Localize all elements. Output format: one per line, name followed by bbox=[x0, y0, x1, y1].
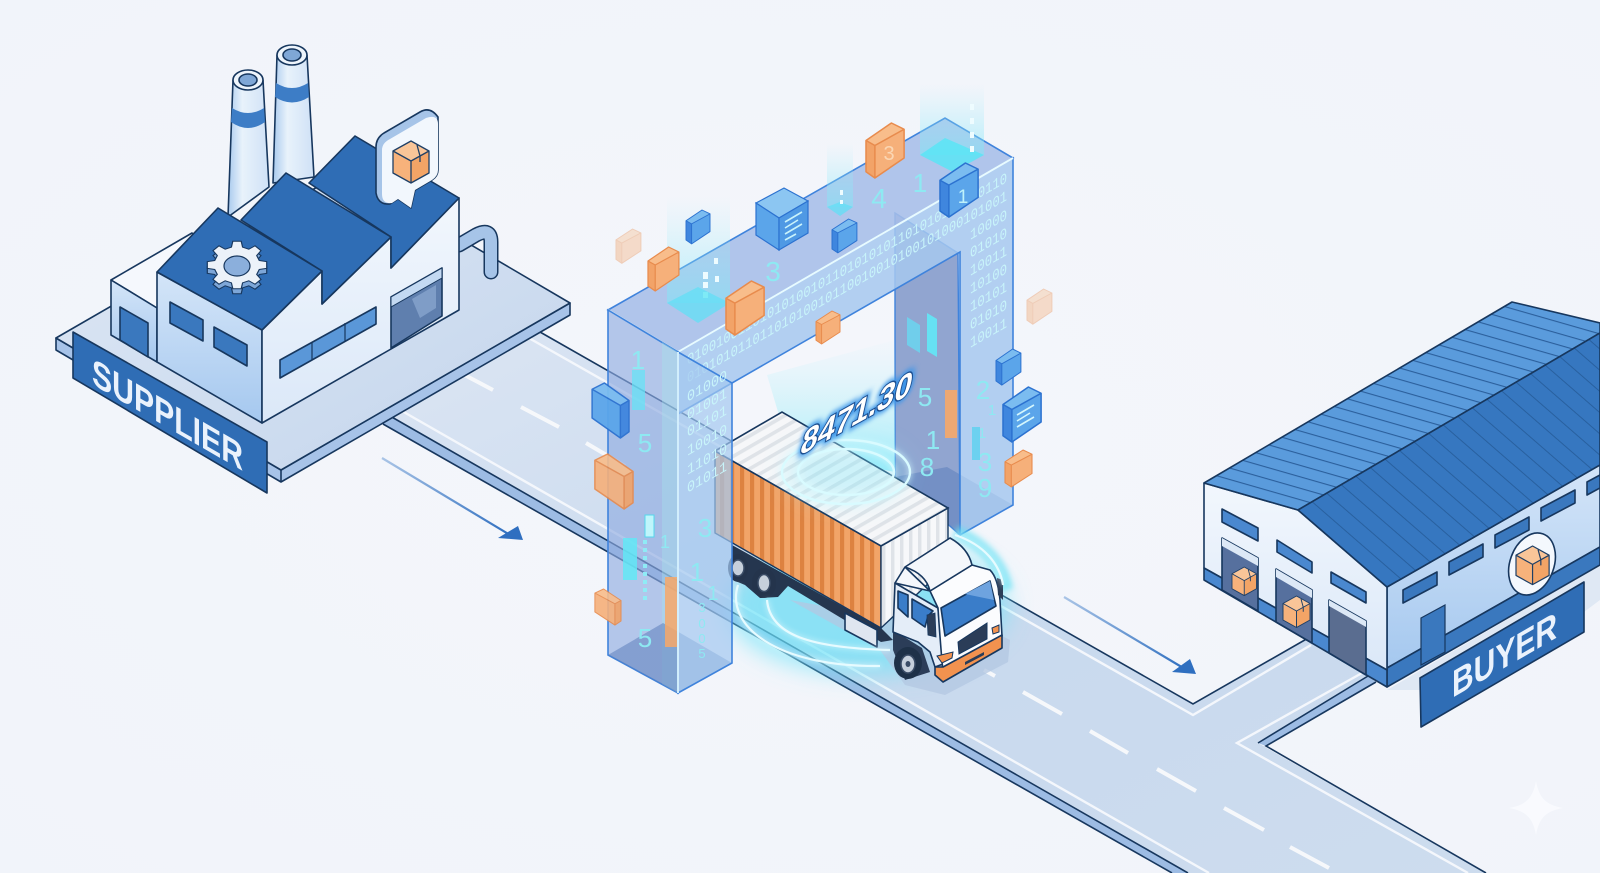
binary code on right pillar: 10000 bbox=[970, 207, 1007, 245]
blue cube left pillar bbox=[592, 383, 629, 438]
digits on left pillar: 5 bbox=[638, 623, 652, 653]
digits on gate right side: 1 bbox=[913, 168, 927, 198]
scan beam bbox=[767, 340, 895, 472]
digits on gate right side: 3 bbox=[978, 447, 992, 477]
gate bright edge bbox=[608, 158, 1013, 352]
digits on left pillar: 0 bbox=[698, 616, 706, 631]
speech bubble with box bbox=[376, 110, 438, 208]
blue document cube right bbox=[1003, 387, 1041, 442]
label: supplier: SUPPLIER bbox=[92, 350, 243, 479]
HS code readout: 8471.30 bbox=[797, 361, 917, 464]
orange cube large bbox=[726, 281, 764, 335]
ground glow under truck bbox=[727, 538, 1007, 674]
blue cube bbox=[832, 219, 857, 253]
binary code on right pillar: 10011 bbox=[970, 315, 1007, 353]
cab glow arc bbox=[955, 532, 1006, 590]
side annex bbox=[111, 233, 240, 362]
data bars on right pillar bbox=[907, 313, 980, 460]
roof front slope bbox=[1298, 333, 1600, 587]
arrow: supplier to gate bbox=[382, 458, 523, 540]
label: buyer bbox=[1420, 582, 1584, 727]
left pillar side highlight band bbox=[662, 342, 678, 693]
digits on left pillar bbox=[631, 345, 719, 661]
left pillar floor bbox=[608, 623, 732, 693]
binary code on left pillar: 10010 bbox=[687, 421, 727, 461]
digits on left pillar: 0 bbox=[698, 631, 706, 646]
pale orange cube right bbox=[1027, 289, 1052, 324]
blue document cube bbox=[756, 188, 808, 250]
front windows bbox=[170, 302, 247, 366]
data bars on left pillar bbox=[623, 370, 677, 647]
road bbox=[383, 332, 1486, 873]
loading dock doors bbox=[1222, 538, 1366, 675]
warehouse right wall bbox=[1387, 465, 1600, 687]
main building walls bbox=[157, 198, 459, 423]
sawtooth roof bbox=[157, 136, 459, 330]
buyer warehouse bbox=[1204, 302, 1600, 690]
number plate bbox=[965, 652, 984, 665]
digits on left pillar: 3 bbox=[698, 600, 706, 615]
left pillar front face bbox=[678, 352, 732, 693]
binary code on beam: 01010101101101010010110010010100101000101001 bbox=[687, 188, 1007, 388]
fog lamp right bbox=[992, 625, 999, 634]
garage door bbox=[391, 268, 442, 348]
cab front bbox=[930, 565, 1002, 672]
binary code on right pillar: 01010 bbox=[970, 225, 1007, 263]
binary code on left pillar: 01001 bbox=[687, 385, 727, 425]
orange cube with digit bbox=[866, 123, 904, 178]
cab side bbox=[893, 583, 943, 667]
bumper bbox=[935, 635, 1002, 682]
grille bbox=[958, 623, 987, 654]
binary code on right pillar: 10100 bbox=[970, 261, 1007, 299]
binary code on left pillar: 11010 bbox=[687, 440, 727, 480]
wheel arch bbox=[893, 630, 930, 680]
fog lamp left bbox=[937, 652, 953, 663]
icon: box in dock 2 bbox=[1283, 596, 1310, 628]
hologram column A bbox=[667, 197, 730, 323]
long window bbox=[280, 307, 376, 378]
watermark sparkle bbox=[1509, 781, 1563, 835]
side windows bbox=[898, 591, 933, 627]
pipe bbox=[459, 232, 491, 272]
digits on left pillar: 1 bbox=[707, 583, 719, 605]
container bbox=[715, 412, 948, 628]
digits on gate right side: 4 bbox=[871, 183, 887, 214]
data pixels bbox=[703, 104, 974, 298]
truck bbox=[715, 412, 1010, 695]
binary code on right pillar: 10101 bbox=[970, 279, 1007, 317]
truck shadow bbox=[790, 600, 1010, 695]
digits on left pillar: 5 bbox=[638, 428, 652, 458]
hologram column C bbox=[920, 83, 984, 172]
gate right pillar floor bbox=[895, 467, 1013, 535]
digits on gate right side: 1 bbox=[988, 402, 996, 419]
chimney: right bbox=[273, 45, 314, 183]
binary code on left pillar bbox=[687, 367, 727, 498]
binary code on right pillar: 10011 bbox=[970, 243, 1007, 281]
digits on gate right side: 1 bbox=[978, 425, 986, 442]
factory platform bbox=[56, 171, 570, 482]
orange cube bbox=[648, 247, 679, 291]
scan rings on container bbox=[782, 440, 910, 504]
digits on gate right side: 9 bbox=[978, 473, 992, 503]
binary code on left pillar: 01011 bbox=[687, 458, 727, 498]
windshield bbox=[941, 581, 996, 636]
icon: gear bbox=[207, 241, 267, 294]
warehouse ground shadow bbox=[1387, 565, 1600, 690]
digits on gate right side: 1 bbox=[926, 425, 940, 455]
warehouse gable wall bbox=[1204, 483, 1387, 687]
left pillar side face bbox=[608, 310, 678, 693]
gate top face bbox=[608, 118, 1013, 352]
rear wheels bbox=[728, 554, 776, 598]
customs gate: back structure bbox=[608, 83, 1013, 535]
digits on gate right side: 8 bbox=[920, 452, 934, 482]
binary code on right pillar: 01010 bbox=[970, 297, 1007, 335]
binary code on beam: 01001001101010100101101010101101010111010110 bbox=[687, 170, 1007, 370]
left pillar bright edge bbox=[677, 352, 679, 693]
blue cube with digit bbox=[940, 163, 978, 217]
digits on left pillar: 3 bbox=[698, 513, 712, 543]
icon: box badge bbox=[1500, 526, 1564, 602]
gate inner right face bbox=[895, 213, 960, 535]
wall windows bbox=[1403, 475, 1600, 603]
binary code on right pillar bbox=[970, 207, 1007, 353]
supplier factory bbox=[56, 45, 570, 482]
side mirror bbox=[927, 613, 936, 637]
digits on left pillar: 5 bbox=[698, 646, 706, 661]
pipe fill bbox=[459, 232, 491, 272]
ground scan rings bbox=[736, 535, 1003, 666]
roof back slope bbox=[1204, 302, 1600, 510]
gate beam and right pillar front bbox=[678, 158, 1013, 535]
side door bbox=[1421, 605, 1445, 665]
cab roof fairing bbox=[895, 538, 972, 591]
orange cube left pillar bbox=[595, 454, 633, 509]
gable windows bbox=[1222, 509, 1366, 603]
fuel tank bbox=[845, 613, 877, 647]
orange cube right side bbox=[1005, 450, 1032, 487]
chimney: left bbox=[228, 70, 269, 217]
digits on left pillar: 1 bbox=[660, 532, 670, 552]
pale orange cube left bbox=[616, 229, 641, 263]
digits on left pillar: 1 bbox=[690, 557, 704, 587]
chassis bbox=[732, 545, 893, 642]
blue cube with digit: 1 bbox=[958, 187, 968, 208]
binary code on left pillar: 01000 bbox=[687, 367, 727, 407]
icon: box in dock 1 bbox=[1232, 567, 1256, 596]
floating data cubes bbox=[592, 123, 1052, 625]
orange cube with digit: 3 bbox=[883, 143, 895, 165]
blue cube bbox=[686, 210, 710, 244]
front wheel bbox=[894, 647, 922, 679]
orange cube small bbox=[816, 311, 840, 344]
orange cube left pillar lower bbox=[595, 589, 621, 625]
digits on gate right side bbox=[765, 168, 996, 503]
binary code on left pillar: 01101 bbox=[687, 402, 727, 442]
label: buyer: BUYER bbox=[1452, 603, 1557, 706]
hologram column B bbox=[827, 143, 853, 216]
digits on left pillar: 1 bbox=[631, 345, 645, 375]
customs gate: front pillar bbox=[608, 310, 732, 693]
right mirror bbox=[997, 578, 1003, 600]
digits on gate right side: 5 bbox=[918, 382, 932, 412]
blue cube right bbox=[996, 349, 1021, 385]
digits on gate right side: 3 bbox=[765, 256, 781, 287]
arrow: gate to buyer bbox=[1064, 597, 1196, 674]
digits on gate right side: 2 bbox=[976, 375, 990, 405]
HS code readout: 8471.30 bbox=[797, 361, 917, 464]
